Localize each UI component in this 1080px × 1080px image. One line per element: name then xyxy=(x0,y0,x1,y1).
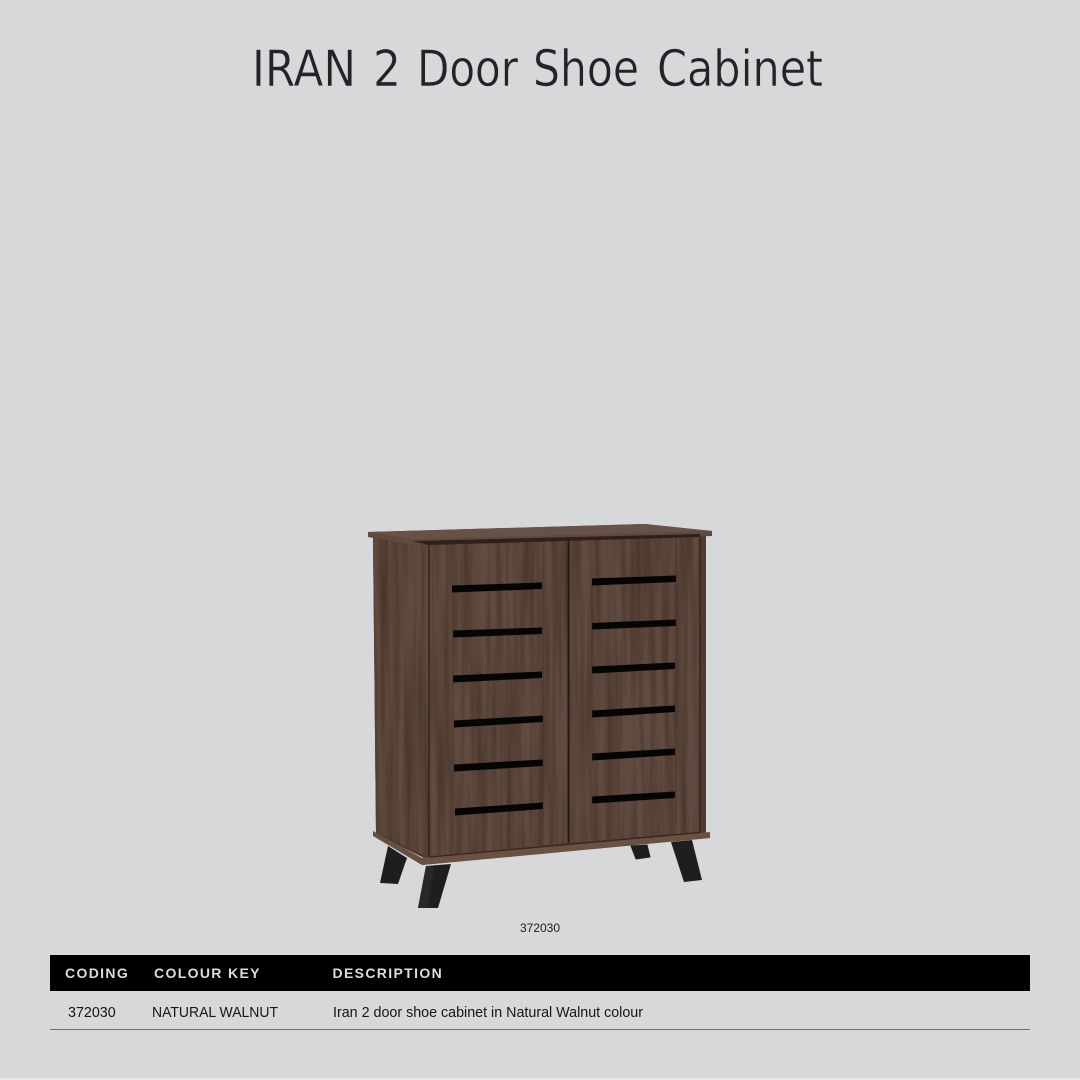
right door xyxy=(569,537,700,843)
right door slats xyxy=(592,576,676,804)
title: Shoe xyxy=(533,40,639,98)
table row: NATURAL WALNUT xyxy=(152,1005,278,1021)
title: Door xyxy=(417,40,519,98)
cabinet side panel xyxy=(373,538,429,858)
door stile lines xyxy=(453,538,676,845)
cabinet back strip xyxy=(699,536,706,833)
table header labels: CODING xyxy=(65,965,129,981)
door gap xyxy=(568,540,570,843)
title: IRAN xyxy=(252,40,356,98)
table xyxy=(50,955,1030,1030)
top panel xyxy=(368,524,712,545)
table header bar xyxy=(50,955,1030,991)
front left leg xyxy=(418,864,451,908)
table header labels: COLOUR KEY xyxy=(154,965,261,981)
cabinet body backing xyxy=(373,532,706,860)
product code caption: 372030 xyxy=(520,921,560,935)
product image: shoe cabinet xyxy=(368,524,712,908)
left door xyxy=(430,541,568,857)
table row xyxy=(68,1005,643,1021)
title xyxy=(252,40,823,98)
title: Cabinet xyxy=(657,40,823,98)
base panel xyxy=(373,831,710,865)
back left leg xyxy=(380,846,407,884)
door edges xyxy=(429,537,700,857)
table row: 372030 xyxy=(68,1005,116,1021)
front right leg xyxy=(671,840,702,882)
back right leg xyxy=(631,845,650,859)
table header labels xyxy=(65,965,443,981)
title: 2 xyxy=(373,40,401,98)
table header labels: DESCRIPTION xyxy=(332,965,443,981)
table row: Iran 2 door shoe cabinet in Natural Walnut colour xyxy=(333,1005,643,1021)
left door slats xyxy=(452,582,543,816)
